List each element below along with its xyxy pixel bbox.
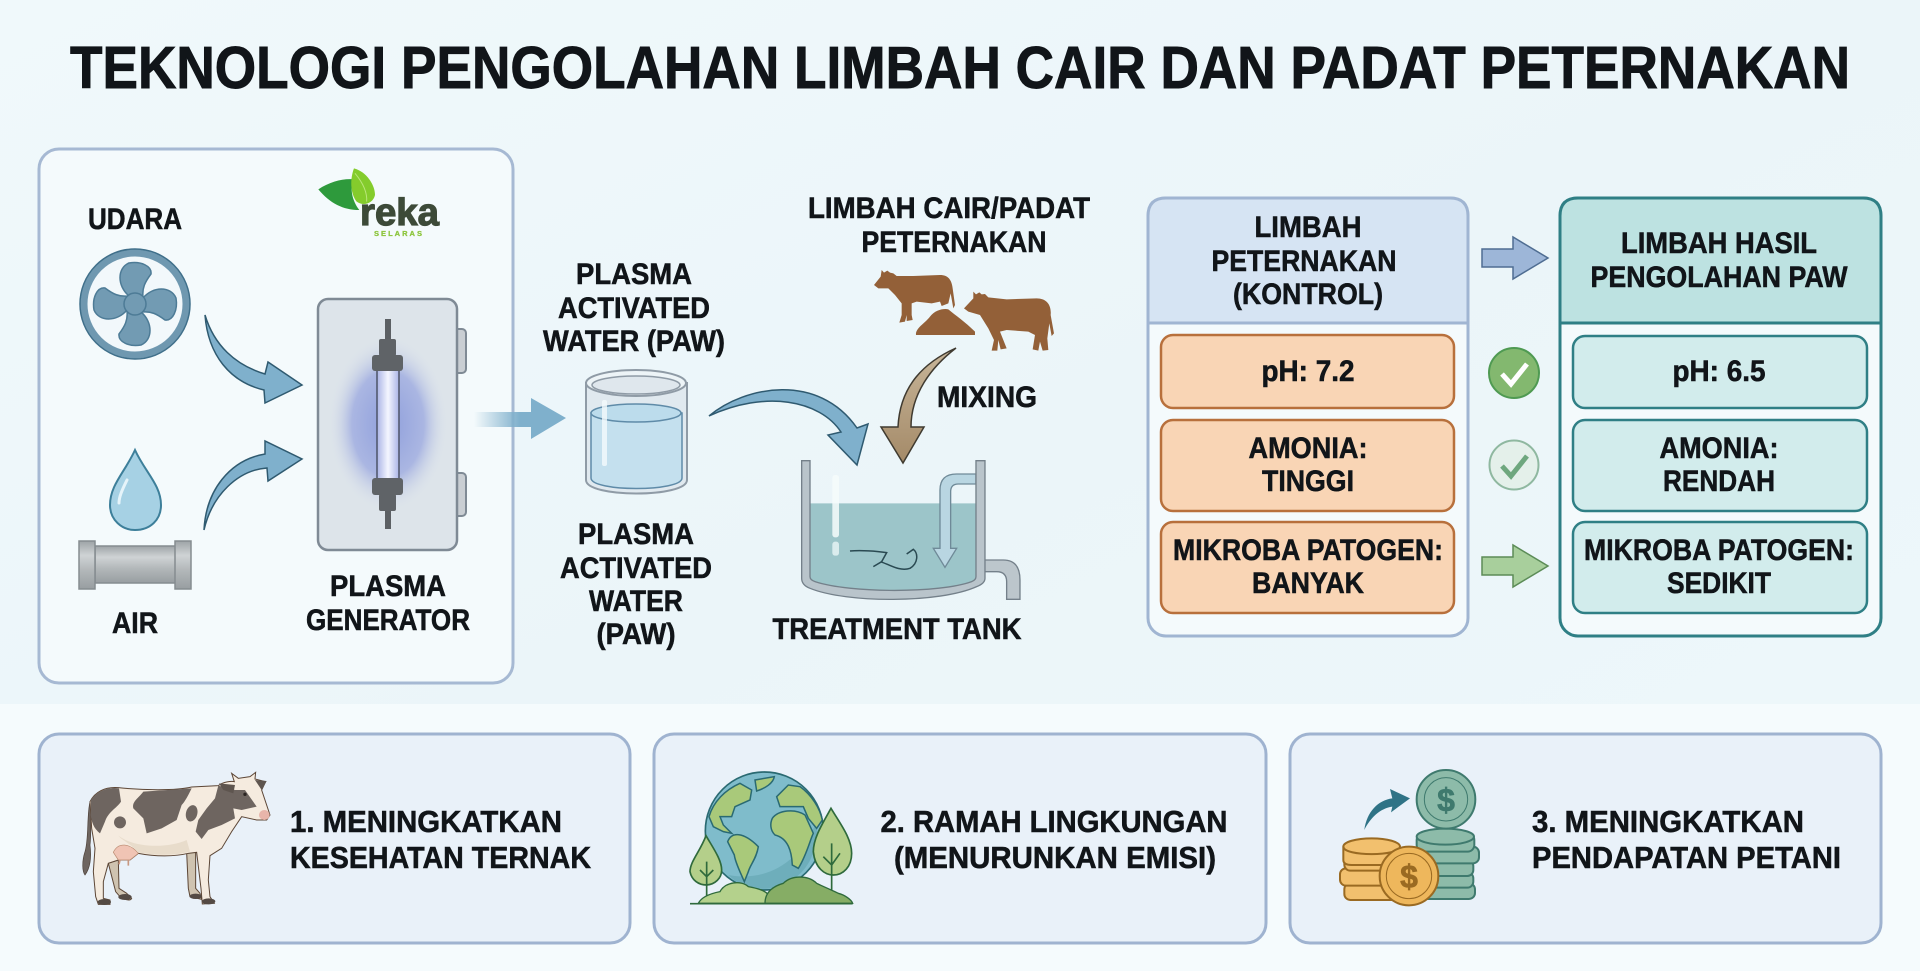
card: mikroba banyak (1161, 522, 1454, 613)
arrow: air to generator (204, 441, 302, 530)
card: amonia tinggi (1161, 420, 1454, 511)
header: limbah hasil pengolahan (1590, 227, 1848, 294)
icon: coins (1340, 770, 1479, 905)
panel: limbah hasil PAW (1560, 198, 1881, 636)
bottom band (0, 704, 1920, 971)
text: benefit 1: 1. MENINGKATKAN (290, 804, 562, 839)
label: limbah cair padat: PETERNAKAN (862, 226, 1046, 259)
arrow: udara to generator (205, 315, 302, 403)
panel: plasma generator input (39, 149, 513, 683)
label: plasma activated water bottom (560, 518, 712, 651)
icon: brown cows and manure (874, 270, 1054, 351)
panel: benefit 1 (39, 734, 630, 943)
arrow: blue comparison (1482, 237, 1548, 279)
header: limbah hasil pengolahan: LIMBAH HASIL (1621, 227, 1817, 260)
icon: coins: $ (1400, 859, 1418, 895)
header: limbah peternakan kontrol: PETERNAKAN (1212, 245, 1396, 278)
header: limbah peternakan kontrol: LIMBAH (1254, 211, 1362, 244)
card: mikroba sedikit (1573, 522, 1867, 613)
icon: treatment tank (802, 461, 1020, 599)
header: limbah hasil pengolahan: PENGOLAHAN PAW (1590, 261, 1848, 294)
label: plasma generator: GENERATOR (306, 604, 470, 637)
card: ph 6.5 (1573, 336, 1867, 408)
label: limbah cair padat: LIMBAH CAIR/PADAT (808, 192, 1090, 225)
text: benefit 3: PENDAPATAN PETANI (1532, 840, 1841, 875)
icon: fan (80, 249, 190, 359)
label: udara: UDARA (88, 203, 182, 236)
card: mikroba sedikit: MIKROBA PATOGEN: (1584, 534, 1854, 567)
header: limbah peternakan kontrol: (KONTROL) (1233, 278, 1383, 311)
text: benefit 3 (1532, 804, 1841, 875)
card: amonia rendah: RENDAH (1663, 465, 1775, 498)
label: plasma activated water top: PLASMA (576, 258, 692, 291)
arrow: mixing (881, 348, 956, 463)
text: benefit 3: 3. MENINGKATKAN (1532, 804, 1804, 839)
label: plasma activated water bottom: (PAW) (596, 618, 676, 651)
card: mikroba banyak: MIKROBA PATOGEN: (1173, 534, 1443, 567)
icon: coins: $ (1437, 782, 1455, 818)
text: benefit 2: (MENURUNKAN EMISI) (894, 840, 1216, 875)
label: plasma activated water top (543, 258, 725, 358)
panel: benefit 2 (654, 734, 1266, 943)
text: benefit 2 (880, 804, 1228, 875)
icon: plasma generator (318, 299, 466, 550)
card: ph 7.2: pH: 7.2 (1262, 355, 1354, 388)
arrow: green comparison (1482, 545, 1548, 587)
arrow: PAW to tank (709, 390, 868, 465)
logo: reka selaras (318, 168, 440, 238)
header: limbah peternakan kontrol (1212, 211, 1396, 311)
label: plasma activated water bottom: PLASMA (578, 518, 694, 551)
label: plasma generator (306, 570, 470, 637)
card: mikroba sedikit: SEDIKIT (1667, 567, 1771, 600)
label: mixing: MIXING (937, 381, 1037, 414)
arrow: generator to PAW (474, 398, 566, 439)
card: amonia tinggi: AMONIA: (1248, 432, 1368, 465)
card: ph 6.5: pH: 6.5 (1672, 355, 1766, 388)
label: plasma activated water bottom: ACTIVATED (560, 552, 712, 585)
icon: water drop (110, 450, 161, 530)
card: ph 7.2 (1161, 335, 1454, 408)
label: plasma activated water top: WATER (PAW) (543, 325, 725, 358)
icon: pipe (79, 541, 191, 589)
logo: reka selaras: reka (360, 192, 440, 234)
card: mikroba banyak: BANYAK (1252, 567, 1364, 600)
label: plasma activated water top: ACTIVATED (558, 292, 710, 325)
logo: reka selaras: SELARAS (374, 229, 422, 238)
label: treatment tank: TREATMENT TANK (772, 613, 1022, 646)
icon: glass of water (586, 370, 687, 494)
panel: limbah kontrol (1148, 198, 1468, 636)
icon: earth with trees (690, 772, 853, 904)
text: benefit 1 (290, 804, 592, 875)
text: benefit 1: KESEHATAN TERNAK (290, 840, 592, 875)
label: plasma generator: PLASMA (330, 570, 446, 603)
label: plasma activated water bottom: WATER (589, 585, 683, 618)
icon: dairy cow (83, 772, 270, 905)
card: amonia rendah: AMONIA: (1660, 432, 1778, 465)
panel: benefit 3 (1290, 734, 1881, 943)
icon: solid check (1489, 348, 1539, 398)
card: amonia tinggi: TINGGI (1262, 465, 1354, 498)
label: air: AIR (112, 607, 158, 640)
card: amonia rendah (1573, 420, 1867, 511)
icon: outline check (1490, 440, 1538, 490)
label: limbah cair padat (808, 192, 1090, 259)
text: benefit 2: 2. RAMAH LINGKUNGAN (880, 804, 1228, 839)
